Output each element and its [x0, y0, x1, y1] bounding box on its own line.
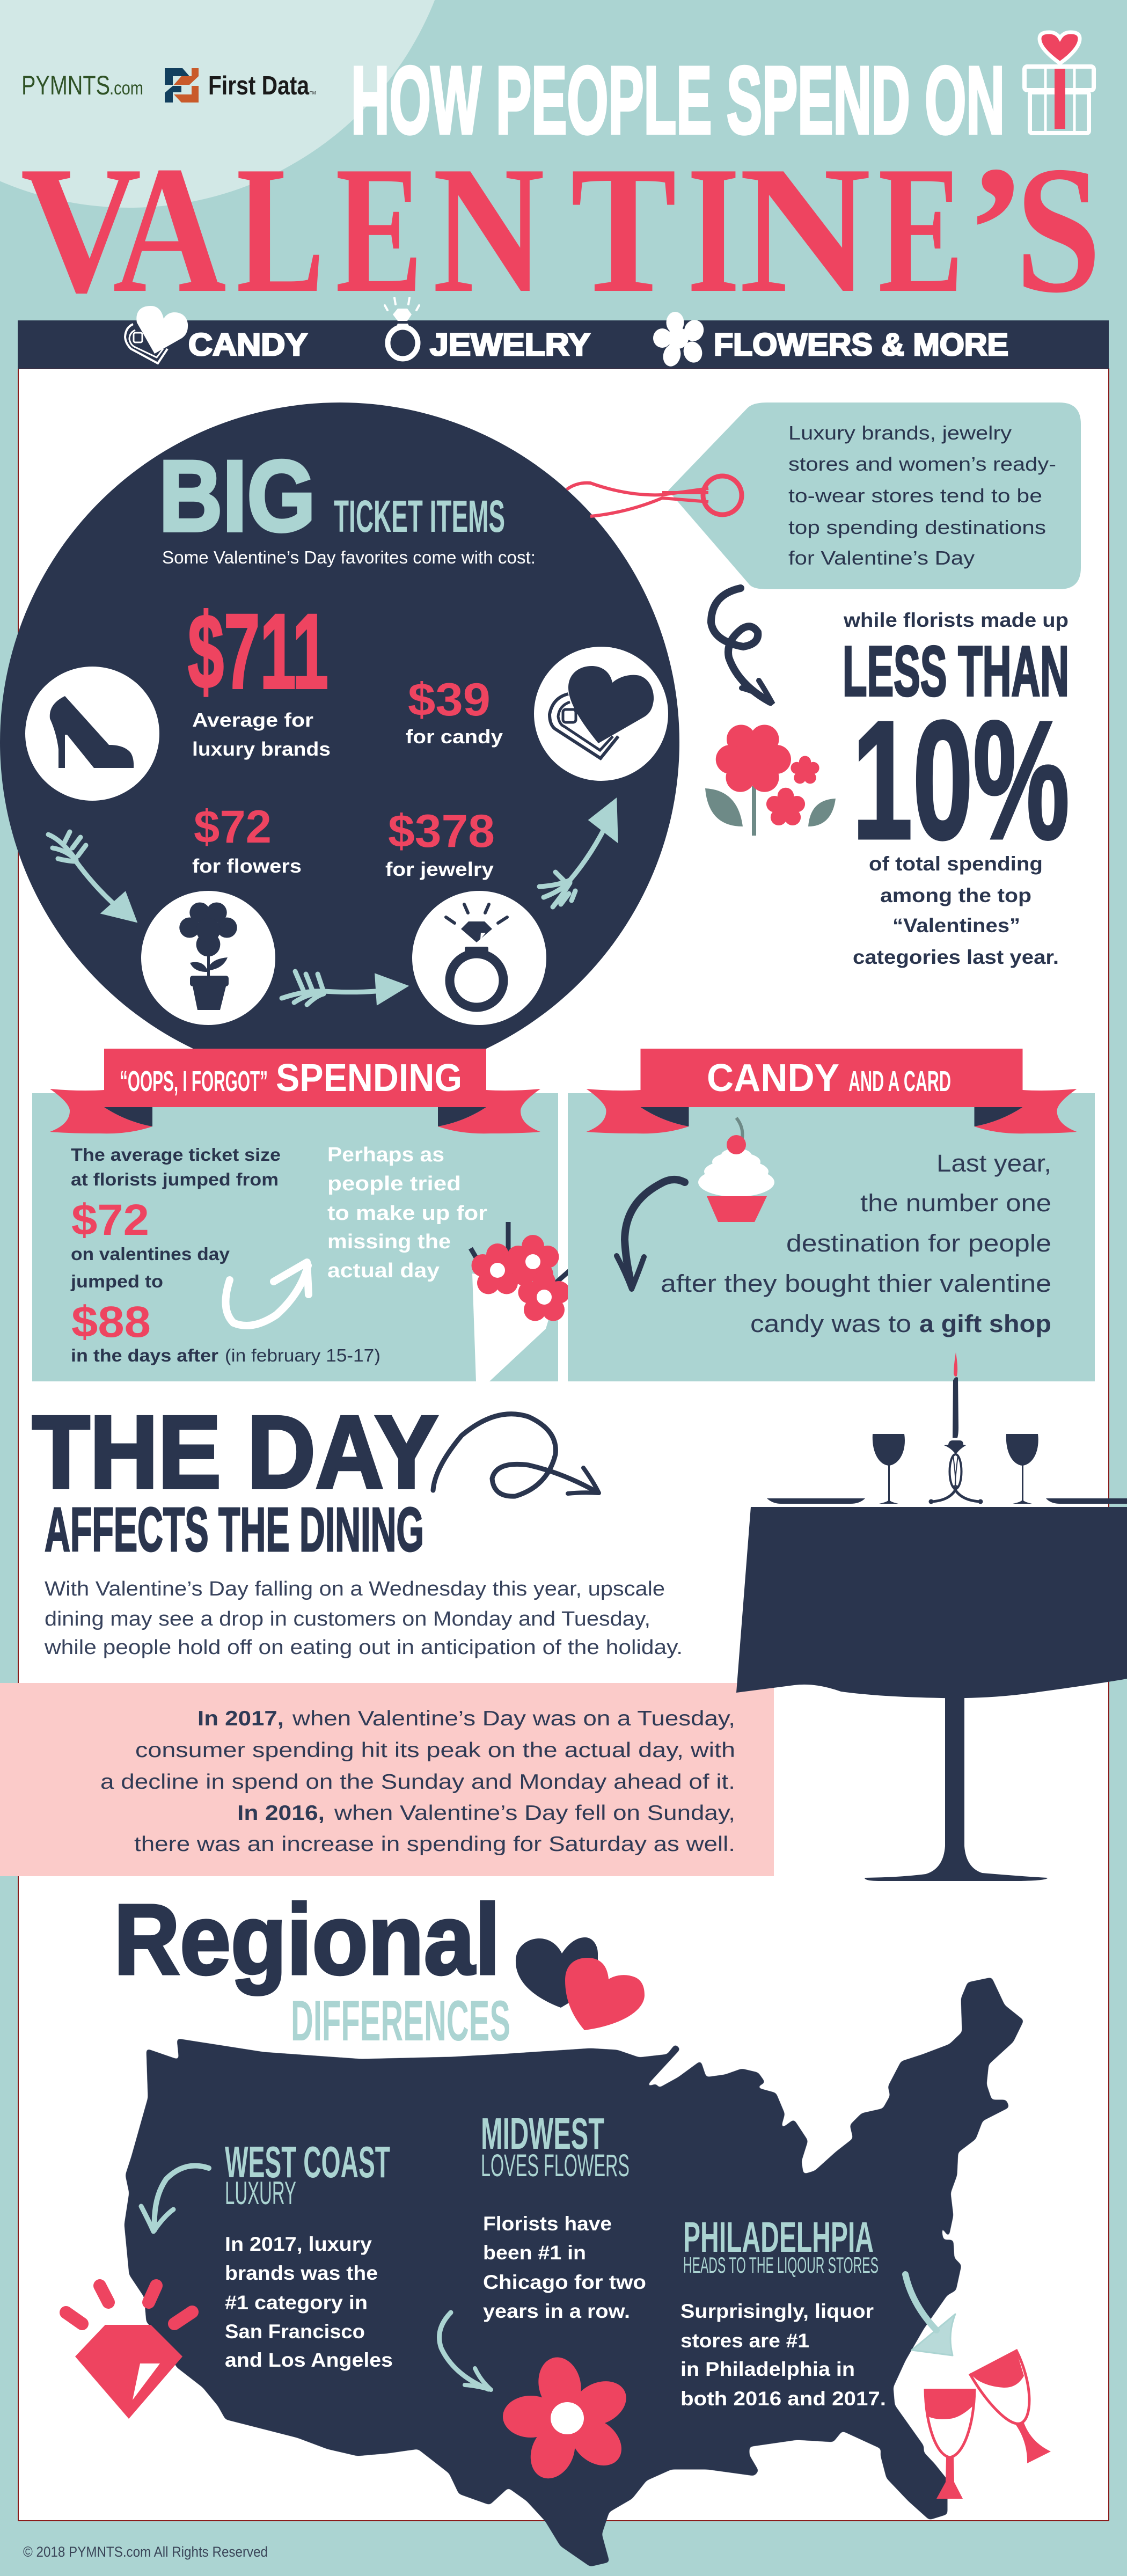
arrow: flower to ring — [282, 971, 404, 1005]
text: gift shop: after they bought thier valentine — [661, 1270, 1051, 1297]
icon: red gem — [66, 2286, 192, 2419]
heading: the day: THE DAY — [32, 1394, 438, 1510]
title: Valentine's: S — [1015, 128, 1101, 331]
text: midwest: years in a row. — [483, 2300, 630, 2322]
title: Valentine's: N — [739, 128, 871, 331]
nav label: candy: CANDY — [188, 327, 308, 362]
text: philadelphia: both 2016 and 2017. — [680, 2388, 886, 2410]
arrow: midwest — [440, 2312, 491, 2390]
stat: $72 flowers — [192, 801, 302, 877]
nav label: jewelry: JEWELRY — [430, 327, 590, 362]
panel: 2017 and 2016 spending: consumer spending hit its peak on the actual day, with — [135, 1739, 735, 1762]
banner: oops I forgot: SPENDING — [276, 1057, 462, 1100]
text: west coast — [225, 2137, 393, 2371]
arrow: swirl — [433, 1414, 599, 1496]
text: wednesday paragraph — [44, 1578, 683, 1659]
nav icon: candy heart box — [125, 306, 188, 363]
text block: less than 10% stat — [843, 609, 1070, 968]
text: gift shop: candy was to — [750, 1310, 911, 1337]
icon: bouquet — [471, 1222, 574, 1381]
text: perhaps: to make up for — [327, 1202, 487, 1225]
stat caption: “Valentines” — [892, 914, 1020, 936]
panel: 2017 and 2016 spending: when Valentine’s Day fell on Sunday, — [334, 1802, 735, 1825]
wine glasses — [873, 1434, 1038, 1504]
heading: affects the dining: AFFECTS THE DINING — [45, 1495, 424, 1564]
banner: candy and a card: AND A CARD — [848, 1065, 951, 1097]
text: ticket size: at florists jumped from — [71, 1169, 279, 1189]
stat: $711 luxury: luxury brands — [192, 738, 331, 760]
stat: $378 jewelry — [385, 806, 495, 880]
nav icon: ring — [385, 298, 419, 358]
panel: 2017 and 2016 spending: In 2016, — [237, 1802, 325, 1825]
heading: regional: Regional — [114, 1884, 500, 1995]
text: west coast: and Los Angeles — [225, 2349, 393, 2371]
text: gift shop: Last year, — [936, 1150, 1051, 1177]
intro text: Some Valentine’s Day favorites come with cost: — [162, 547, 536, 567]
stat: $39 candy — [406, 674, 503, 748]
panel: 2017 and 2016 spending: In 2017, — [197, 1707, 284, 1730]
panel: category navigation bar — [18, 298, 1109, 369]
text: philadelphia: Surprisingly, liquor — [680, 2300, 874, 2322]
title: Valentine's: V — [20, 128, 142, 331]
icon: heart candy box — [534, 647, 668, 781]
title: Valentine's: E — [335, 128, 423, 331]
text: ticket size: The average ticket size — [71, 1145, 281, 1165]
title: Valentine's: E — [878, 128, 964, 331]
stat caption: categories last year. — [853, 946, 1059, 968]
text: midwest: Florists have — [483, 2213, 612, 2235]
text: gift shop: a gift shop — [919, 1310, 1051, 1337]
stat: $378 jewelry: for jewelry — [385, 858, 494, 880]
text: philadelphia: in Philadelphia in — [680, 2358, 855, 2380]
text: west coast: San Francisco — [225, 2321, 365, 2343]
tag text: stores and women’s ready- — [788, 453, 1056, 475]
arrow: philadelphia scribble — [905, 2274, 955, 2355]
text: philadelphia: HEADS TO THE LIQOUR STORES — [683, 2252, 879, 2278]
logo: PYMNTS.com: .com — [109, 78, 143, 99]
text: perhaps — [327, 1144, 487, 1282]
text: philadelphia — [680, 2213, 886, 2410]
text: perhaps: Perhaps as — [327, 1144, 444, 1166]
panel: 2017 and 2016 spending: there was an increase in spending for Saturday as well. — [134, 1833, 735, 1856]
text: philadelphia: PHILADELHPIA — [683, 2213, 874, 2261]
text: gift shop: the number one — [860, 1189, 1051, 1217]
tag text: top spending destinations — [788, 516, 1046, 538]
panel: 2017 and 2016 spending — [0, 1683, 774, 1876]
panel: oops I forgot spending — [32, 1049, 574, 1381]
logo: First Data: TM — [310, 91, 316, 96]
title: Valentine's: T — [570, 128, 677, 331]
icon: potted flower — [141, 891, 275, 1025]
title: Valentine's: L — [236, 128, 325, 331]
map: United States — [125, 1978, 1023, 2566]
heading: differences: DIFFERENCES — [291, 1988, 510, 2053]
text: midwest: been #1 in — [483, 2242, 586, 2264]
text: midwest: LOVES FLOWERS — [481, 2148, 630, 2183]
text: west coast: #1 category in — [225, 2292, 368, 2314]
text: midwest: Chicago for two — [483, 2271, 646, 2293]
arrow: curly navy — [711, 588, 773, 704]
copyright: © 2018 PYMNTS.com All Rights Reserved — [23, 2544, 268, 2560]
arrow: west coast — [141, 2166, 209, 2231]
nav icon: flower — [653, 312, 707, 368]
stat: $39 candy: for candy — [406, 726, 503, 748]
stat caption: of total spending — [869, 853, 1043, 875]
stat caption: among the top — [880, 884, 1031, 906]
text: midwest: MIDWEST — [481, 2109, 604, 2158]
arrow: shoe to flower — [48, 832, 134, 919]
icon: midwest flower — [503, 2353, 633, 2485]
panel: big ticket items circle — [0, 402, 679, 1082]
stat: $72 flowers: $72 — [194, 801, 272, 853]
icon: two hearts — [516, 1937, 645, 2030]
stat: $378 jewelry: $378 — [388, 806, 495, 857]
panel: 2017 and 2016 spending: when Valentine’s Day was on a Tuesday, — [292, 1707, 735, 1730]
text: perhaps: actual day — [327, 1260, 440, 1282]
icon: gift with heart — [1024, 32, 1094, 133]
title: Valentine's: I — [687, 128, 740, 331]
text: ticket size: on valentines day — [71, 1244, 230, 1264]
title: Valentine's — [20, 128, 1101, 331]
text: wednesday paragraph: dining may see a drop in customers on Monday and Tuesday, — [45, 1608, 650, 1630]
text: midwest — [481, 2109, 646, 2322]
icon: shoe — [25, 667, 159, 801]
text: west coast: brands was the — [225, 2262, 378, 2284]
text: ticket size: (in february 15-17) — [225, 1345, 380, 1365]
logo: First Data — [165, 68, 316, 103]
arrow: white upward — [225, 1262, 309, 1326]
text: west coast: In 2017, luxury — [225, 2233, 372, 2255]
text: ticket size: $88 — [71, 1298, 151, 1346]
arrow: navy curved down — [617, 1180, 685, 1289]
stat caption — [853, 853, 1059, 968]
tag string — [567, 476, 742, 516]
tag text: for Valentine’s Day — [788, 547, 975, 569]
title: Valentine's: N — [433, 128, 545, 331]
nav label: flowers and more: FLOWERS & MORE — [714, 327, 1008, 362]
candle and holder — [928, 1352, 983, 1504]
banner: candy and a card: CANDY — [707, 1057, 839, 1100]
text: west coast: WEST COAST — [225, 2137, 390, 2187]
text: ticket size: in the days after — [71, 1345, 218, 1365]
text: gift shop — [661, 1150, 1051, 1337]
stat: $711 luxury: Average for — [192, 709, 313, 731]
banner: candy and a card — [586, 1049, 1077, 1133]
logo: PYMNTS.com: PYMNTS — [21, 70, 110, 100]
banner: oops I forgot — [50, 1049, 540, 1133]
stat: $72 flowers: for flowers — [192, 855, 302, 877]
tag text: Luxury brands, jewelry — [788, 422, 1012, 444]
icon: red flowers — [705, 724, 836, 836]
text: gift shop: destination for people — [786, 1230, 1051, 1257]
logo: First Data: First Data — [208, 71, 310, 100]
text: west coast: LUXURY — [225, 2175, 296, 2211]
banner: oops I forgot: “OOPS, I FORGOT” — [120, 1065, 268, 1097]
text: ticket size: jumped to — [70, 1271, 163, 1291]
stat: $39 candy: $39 — [408, 674, 491, 726]
stat: $711 luxury — [188, 592, 331, 760]
stat: $711 luxury: $711 — [188, 592, 328, 711]
text: philadelphia: stores are #1 — [680, 2330, 809, 2352]
text block: less than 10% stat: while florists made up — [843, 609, 1069, 631]
heading: ticket items: TICKET ITEMS — [334, 491, 505, 541]
text: perhaps: missing the — [327, 1231, 451, 1253]
text: wednesday paragraph: With Valentine’s Day falling on a Wednesday this year, upscale — [45, 1578, 665, 1600]
panel: 2017 and 2016 spending: a decline in spend on the Sunday and Monday ahead of it. — [100, 1770, 735, 1794]
icon: diamond ring — [412, 891, 546, 1025]
title: Valentine's: ’ — [966, 128, 1027, 331]
text: perhaps: people tried — [327, 1173, 461, 1195]
title: Valentine's: A — [113, 128, 226, 331]
tag text: to-wear stores tend to be — [788, 485, 1042, 507]
text: ticket size: $72 — [71, 1196, 149, 1245]
icon: cupcake — [698, 1118, 774, 1222]
arrow: ring to candy — [539, 802, 616, 907]
text: wednesday paragraph: while people hold off on eating out in anticipation of the holiday. — [44, 1636, 683, 1659]
icon: dining table — [736, 1352, 1127, 1881]
plates — [767, 1498, 1127, 1504]
text: ticket size — [70, 1145, 380, 1365]
panel: candy and a card — [568, 1049, 1095, 1381]
tag text — [788, 422, 1056, 569]
heading: BIG: BIG — [159, 440, 316, 552]
icon: wine glasses — [924, 2350, 1051, 2499]
panel: price tag callout — [567, 402, 1081, 589]
